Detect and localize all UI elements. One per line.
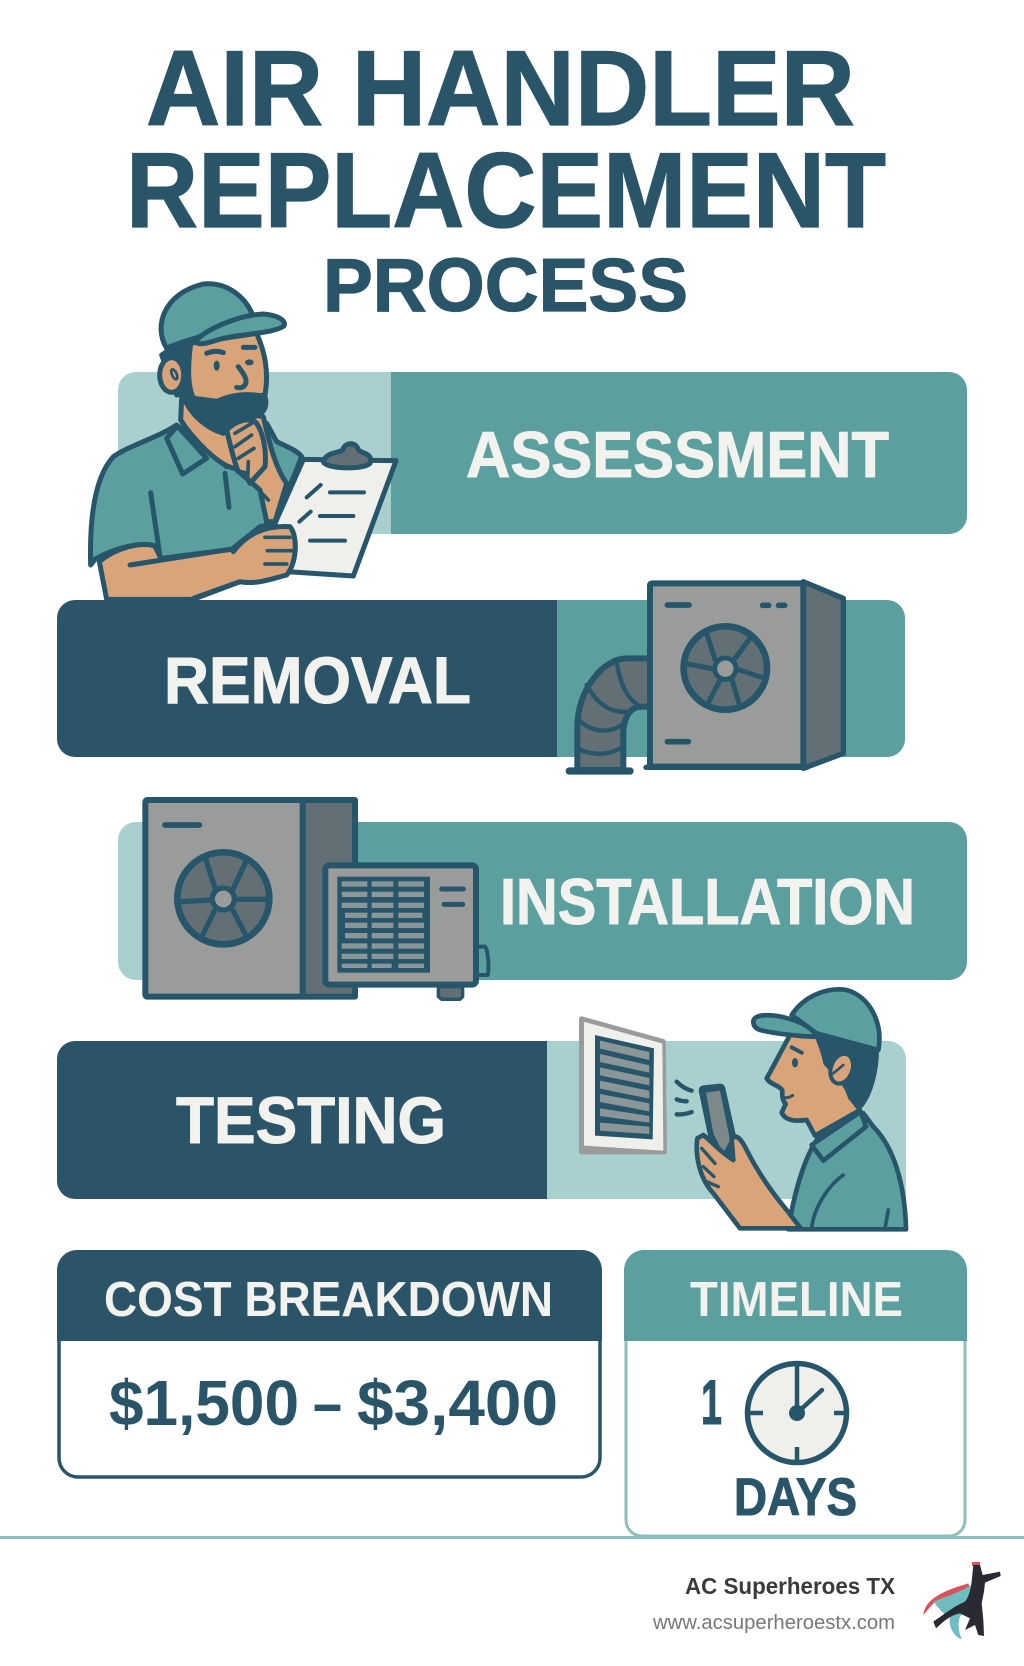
title [126,28,886,327]
panel: assessment bar: ASSESSMENT [466,418,889,491]
panel: testing bar [57,1041,906,1199]
title: AIR HANDLER [146,28,855,148]
heading: cost breakdown: COST BREAKDOWN [104,1273,553,1327]
icon: technician with clipboard [90,284,396,599]
icon: clock [748,1364,847,1462]
footer brand text: AC Superheroes TX [685,1573,896,1599]
panel: assessment bar [118,372,967,534]
icon: old air handler unit with duct [569,582,843,771]
panel: installation bar: INSTALLATION [500,865,915,938]
title: REPLACEMENT [126,130,886,250]
title: PROCESS [323,243,688,327]
panel: testing bar: TESTING [176,1083,446,1157]
cost range value: $1,500 [109,1367,299,1439]
icon: superhero logo [923,1562,1001,1639]
panel: installation bar [118,822,967,980]
cost range value [109,1367,558,1439]
icon: new air handler and condenser [145,800,488,999]
panel: removal bar: REMOVAL [164,643,471,717]
timeline unit: DAYS [734,1468,857,1527]
footer brand text [652,1573,896,1634]
footer brand text: www.acsuperheroestx.com [652,1612,895,1634]
footer rule [0,1536,1024,1539]
heading: timeline: TIMELINE [690,1273,903,1327]
icon: vent and technician with phone [581,989,906,1229]
panel: removal bar [57,600,905,757]
timeline number: 1 [701,1368,722,1438]
cost range value: – [313,1367,342,1439]
cost range value: $3,400 [357,1367,558,1439]
panel: cost breakdown [57,1250,602,1479]
panel: timeline [624,1250,967,1536]
